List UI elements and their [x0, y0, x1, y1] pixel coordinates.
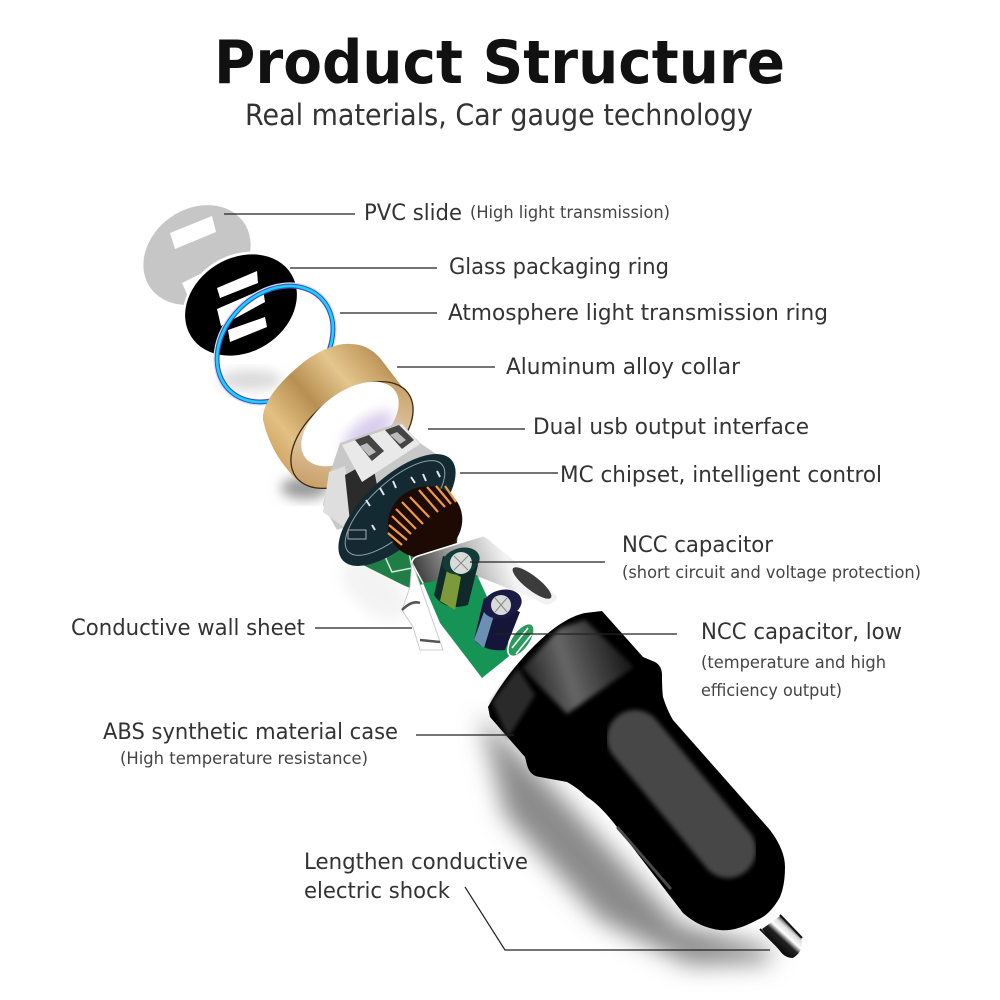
icon: exploded car charger [124, 185, 802, 965]
left edge sheen [492, 668, 535, 738]
ABS synthetic material case [488, 611, 785, 930]
side slot [618, 828, 670, 888]
spring contact [503, 619, 539, 661]
dual usb output interface [323, 422, 445, 530]
label: NCC capacitor low [701, 620, 902, 701]
label: MC chipset: MC chipset, intelligent control [560, 463, 882, 488]
pill highlight [635, 738, 728, 850]
case shadow [480, 715, 770, 965]
label: NCC capacitor [622, 533, 921, 583]
label: lengthen conductive [304, 850, 528, 904]
atmosphere light ring [189, 258, 361, 430]
ring shadow [218, 370, 282, 390]
label: ABS case [103, 720, 398, 769]
green PCB main [423, 575, 513, 678]
label: PVC slide: PVC slide [364, 201, 462, 226]
label: PVC slide: (High light transmission) [470, 203, 670, 223]
soft shadow behind board [330, 547, 420, 633]
label: NCC capacitor: NCC capacitor [622, 533, 774, 558]
label: aluminum collar: Aluminum alloy collar [506, 355, 741, 380]
conductive wall sheet and metal clip [402, 536, 558, 650]
label: NCC capacitor: (short circuit and voltage protection) [622, 563, 921, 583]
aluminum alloy collar [263, 344, 433, 510]
green circuit board [353, 538, 470, 588]
PVC slide disc [124, 185, 270, 325]
label: NCC capacitor low: efficiency output) [701, 681, 842, 701]
metal pin [760, 915, 802, 958]
label: atmosphere ring: Atmosphere light transmission ring [448, 301, 828, 326]
label: lengthen conductive: electric shock [304, 879, 450, 904]
copper coil [375, 473, 475, 571]
subtitle: Real materials, Car gauge technology [245, 98, 753, 132]
label: NCC capacitor low: NCC capacitor, low [701, 620, 902, 645]
leader lines [224, 214, 770, 950]
glass packaging ring disc [163, 230, 319, 380]
label: ABS case: ABS synthetic material case [103, 720, 398, 745]
label: conductive wall sheet: Conductive wall sheet [71, 616, 305, 641]
label: lengthen conductive: Lengthen conductive [304, 850, 528, 875]
label: glass packaging ring: Glass packaging ring [449, 255, 669, 280]
collar highlight [522, 620, 634, 714]
collar shadow [281, 477, 329, 499]
label: ABS case: (High temperature resistance) [120, 749, 368, 769]
MC chipset disc [320, 435, 474, 585]
label: PVC slide [364, 201, 670, 226]
NCC capacitor [434, 544, 483, 610]
NCC capacitor low [474, 585, 525, 650]
label: dual usb: Dual usb output interface [533, 415, 809, 440]
label: NCC capacitor low: (temperature and high [701, 653, 886, 673]
title: Product Structure [214, 28, 785, 98]
